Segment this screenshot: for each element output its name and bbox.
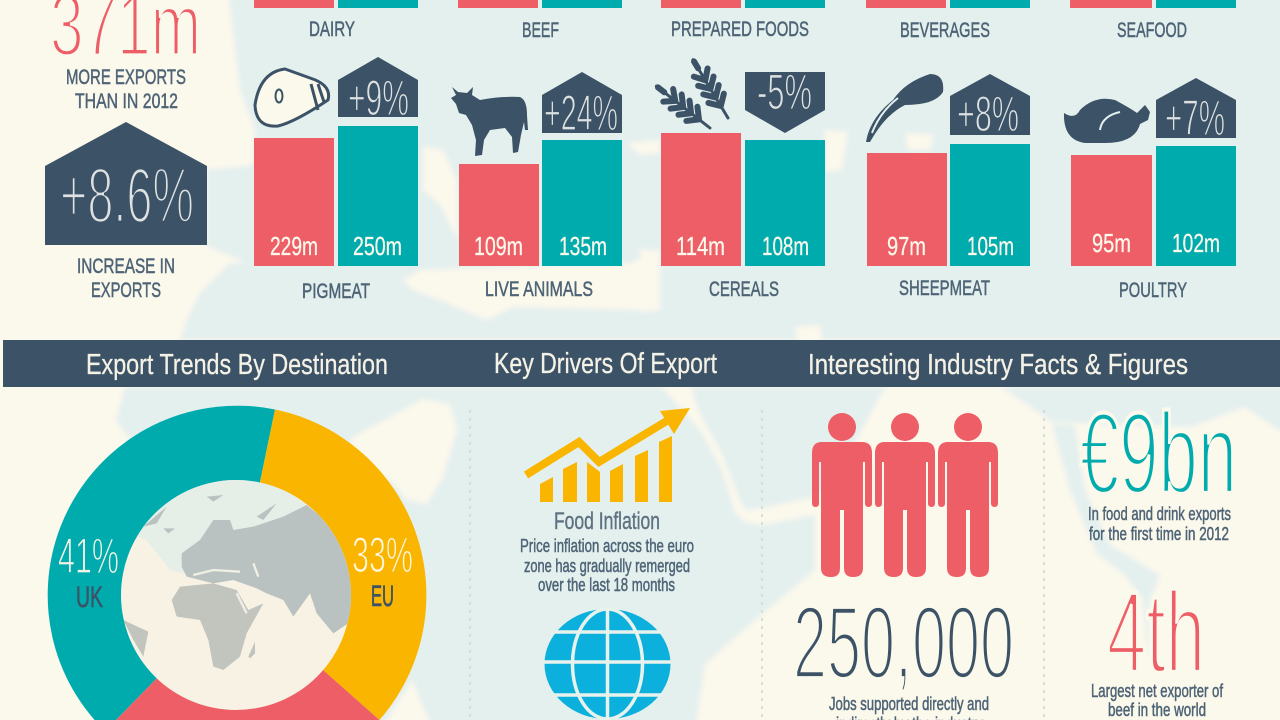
panel: pigmeat: 250m	[353, 231, 402, 261]
text: increase in exports: INCREASE IN	[77, 255, 175, 278]
text: food inflation: Price inflation across the euro	[520, 536, 694, 556]
text: food inflation: zone has gradually remerged	[524, 556, 690, 576]
top row labels: BEEF	[522, 19, 559, 42]
section header band: Interesting Industry Facts & Figures	[808, 349, 1188, 381]
text: food and drink exports	[1088, 504, 1231, 544]
big number: 4th: 4th	[1107, 569, 1205, 697]
icon: cow	[451, 87, 528, 156]
text: food inflation: Food Inflation	[554, 508, 660, 535]
badge: +9%: +9%	[348, 70, 409, 126]
panel: poultry: POULTRY	[1119, 279, 1187, 302]
badge: +8%: +8%	[957, 86, 1019, 142]
panel: sheepmeat: SHEEPMEAT	[899, 277, 990, 300]
badge: +7%	[1156, 78, 1236, 146]
panel: cereals: CEREALS	[709, 278, 779, 301]
panel: cereals	[651, 55, 825, 301]
text: more exports: MORE EXPORTS	[66, 66, 186, 89]
icon: lamb shank	[866, 74, 943, 142]
badge: +24%	[542, 72, 622, 141]
top row labels: BEVERAGES	[900, 19, 990, 42]
section header band: Key Drivers Of Export	[494, 348, 717, 380]
panel: pigmeat: 229m	[270, 231, 318, 261]
text: food and drink exports: for the first time in 2012	[1089, 524, 1229, 544]
label: EU 33%	[352, 527, 413, 613]
panel: poultry	[1064, 78, 1236, 302]
text: largest net exporter	[1091, 681, 1224, 720]
text: increase in exports: EXPORTS	[91, 279, 161, 302]
badge: +8.6%: +8.6%	[60, 151, 194, 239]
panel: sheepmeat: 105m	[967, 231, 1014, 261]
panel: pigmeat	[254, 57, 418, 303]
panel: cereals: 108m	[762, 231, 809, 261]
icon: rising chart	[526, 408, 690, 502]
section header band: Export Trends By Destination	[86, 349, 388, 381]
donut chart: export destinations	[48, 406, 426, 720]
icon: ham	[255, 69, 329, 126]
panel: pigmeat: PIGMEAT	[302, 280, 370, 303]
badge: +8%	[950, 74, 1030, 142]
badge: +7%: +7%	[1165, 90, 1225, 146]
bar pair: dairy	[254, 0, 418, 8]
label: UK 41%: 41%	[58, 528, 119, 584]
bar pair: prepared foods	[661, 0, 825, 8]
text: more exports	[66, 66, 186, 113]
bar pair: seafood	[1070, 0, 1236, 8]
dashed dividers	[470, 410, 1044, 720]
bar pair: beef	[458, 0, 622, 8]
panel: poultry: 102m	[1172, 228, 1220, 258]
text: more exports: THAN IN 2012	[75, 90, 178, 113]
label: UK 41%: UK	[76, 581, 103, 614]
badge: +24%: +24%	[544, 85, 618, 141]
badge: -5%: -5%	[757, 64, 812, 120]
badge: +9%	[338, 57, 418, 126]
panel: live animals: LIVE ANIMALS	[485, 278, 593, 301]
text: food inflation	[520, 508, 694, 595]
text: jobs supported: Jobs supported directly and	[829, 694, 989, 714]
label: UK 41%	[58, 528, 119, 614]
panel: sheepmeat: 97m	[887, 231, 926, 261]
label: EU 33%: EU	[371, 580, 394, 613]
badge: -5%	[745, 64, 825, 133]
text: jobs supported	[829, 694, 989, 720]
panel: cereals: 114m	[676, 231, 725, 261]
panel: sheepmeat	[866, 74, 1030, 300]
label: EU 33%: 33%	[352, 527, 413, 583]
panel: poultry: 95m	[1092, 228, 1131, 258]
icon: chicken	[1064, 99, 1150, 143]
text: increase in exports	[77, 255, 175, 302]
icon: globe	[544, 609, 671, 719]
text: largest net exporter: beef in the world	[1108, 700, 1206, 720]
panel: live animals: 109m	[474, 231, 523, 261]
top row labels: PREPARED FOODS	[671, 18, 809, 41]
panel: live animals	[451, 72, 622, 301]
icon: wheat	[651, 55, 736, 135]
big number: 250,000: 250,000	[793, 585, 1014, 700]
badge: +8.6%	[45, 122, 207, 245]
bar pair: beverages	[866, 0, 1030, 8]
icon: people	[812, 413, 998, 577]
panel: live animals: 135m	[559, 231, 607, 261]
text: largest net exporter: Largest net exporter of	[1091, 681, 1224, 701]
globe map	[113, 473, 353, 670]
top row labels: DAIRY	[309, 18, 355, 41]
top row labels	[309, 18, 1187, 42]
panel: top row bars	[254, 0, 1236, 8]
top row labels: SEAFOOD	[1117, 19, 1187, 42]
section header band	[3, 340, 1280, 387]
text: food inflation: over the last 18 months	[538, 575, 675, 595]
